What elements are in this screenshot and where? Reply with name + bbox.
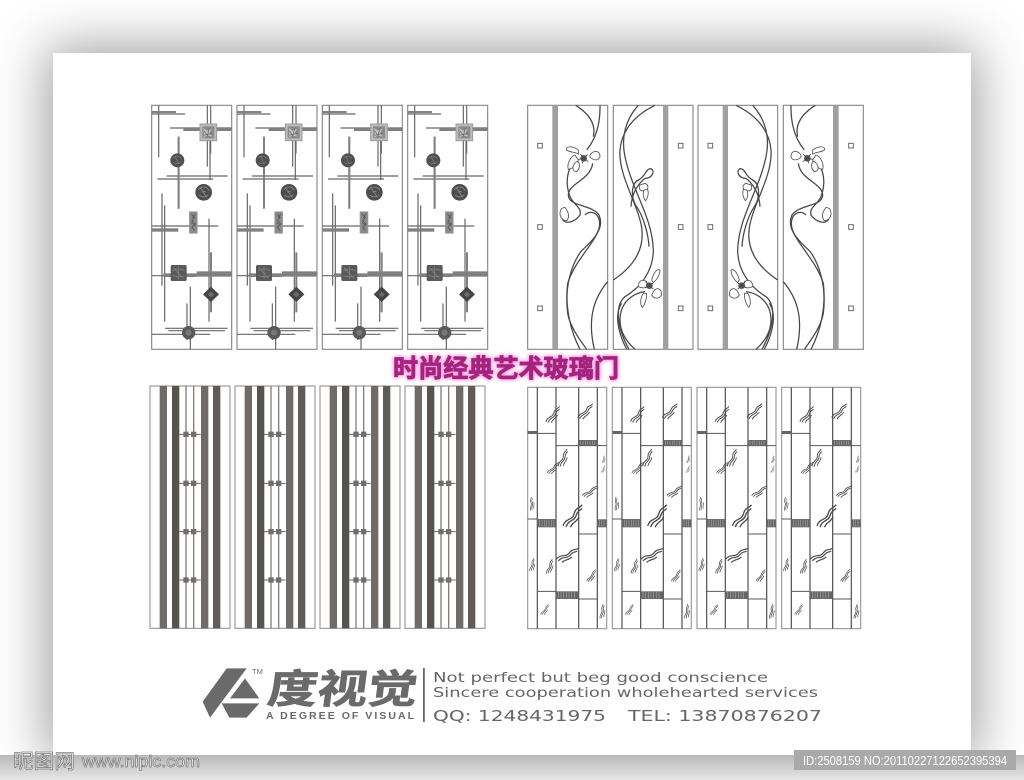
panel: wisp pattern glass doors xyxy=(526,387,863,629)
logo: A Degree of Visual xyxy=(203,657,422,722)
logo wordmark: 度视觉 xyxy=(264,657,422,715)
title: 时尚经典艺术玻璃门 xyxy=(393,349,619,385)
panel: vertical striped glass doors xyxy=(150,386,485,628)
slogan line 1: Not perfect but beg good conscience xyxy=(433,670,768,686)
divider bar xyxy=(423,668,425,722)
logo subtitle: A DEGREE OF VISUAL xyxy=(266,710,415,722)
watermark url: www.nipic.com xyxy=(81,752,200,771)
panel: geometric ornament glass doors xyxy=(152,105,488,349)
icon: triangular A mark xyxy=(203,668,259,718)
slogan and contact xyxy=(423,668,822,725)
watermark Chinese name: 昵图网 xyxy=(13,745,75,774)
QQ contact: QQ: 1248431975 xyxy=(433,707,606,725)
panel: floral vine glass doors xyxy=(528,105,863,349)
slogan line 2: Sincere cooperation wholehearted services xyxy=(433,685,818,701)
bottom shadow band xyxy=(0,755,1024,780)
watermark: nipic site xyxy=(13,745,200,774)
image ID box xyxy=(794,750,1016,770)
telephone contact: TEL: 13870876207 xyxy=(627,707,822,725)
trademark: TM xyxy=(252,667,263,676)
